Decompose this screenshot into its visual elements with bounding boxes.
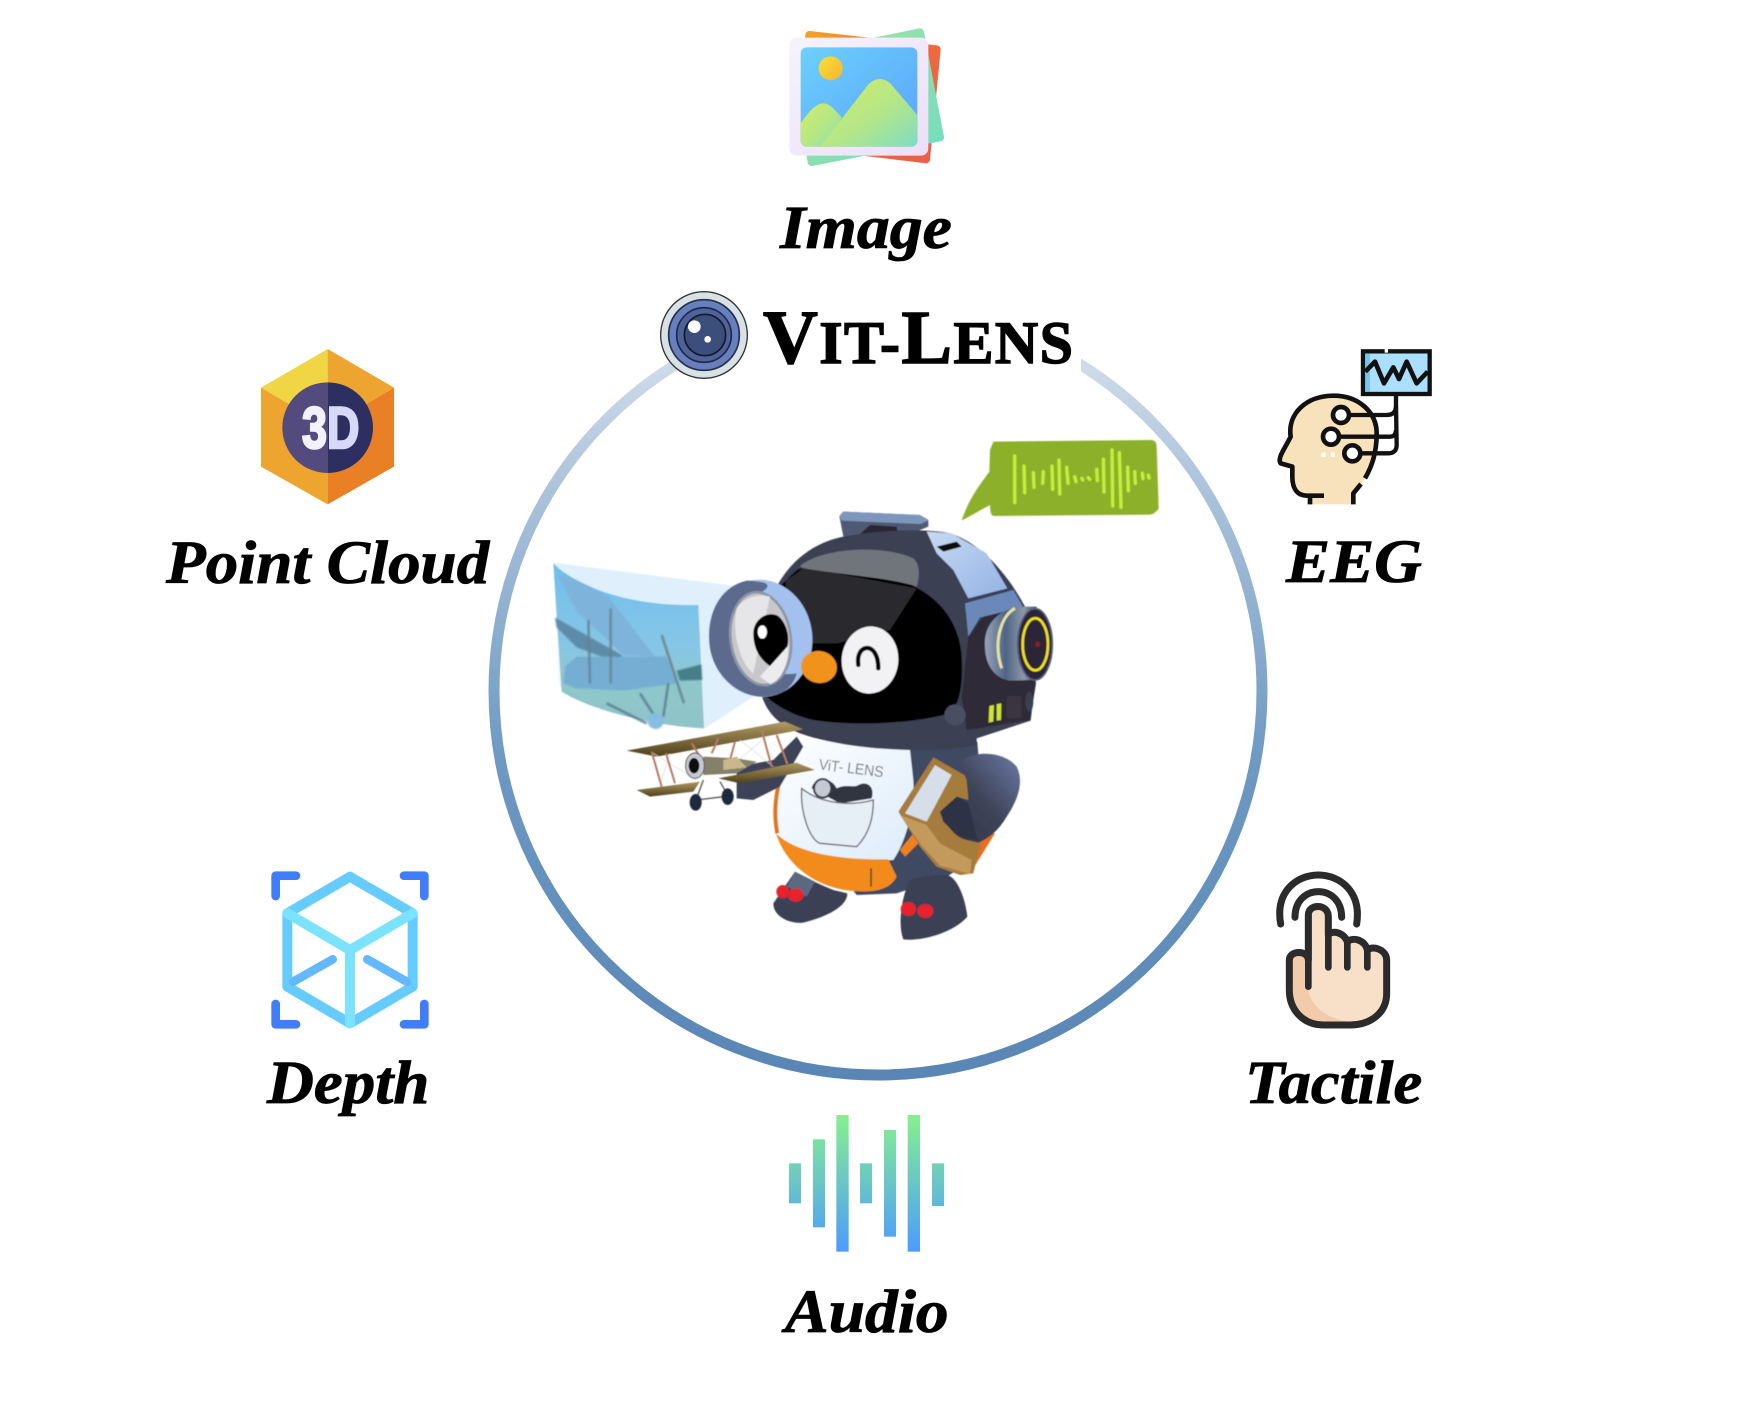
title: ViT-Lens: VIT-LENS xyxy=(763,296,1073,380)
toy biplane in flipper xyxy=(627,722,815,811)
title backing mask xyxy=(682,275,1081,375)
icon: 3D point cloud: 3D xyxy=(302,396,359,461)
image modality icon xyxy=(789,32,940,162)
magnifier lens over eye xyxy=(703,575,818,702)
mascot: penguin with helmet xyxy=(553,440,1159,940)
projected biplane image xyxy=(553,563,753,729)
beak xyxy=(798,648,840,686)
icon: tactile touch hand xyxy=(1280,875,1387,1025)
lens logo xyxy=(661,292,747,378)
label: Audio: Audio xyxy=(781,1277,949,1346)
icon: audio waveform xyxy=(789,1115,944,1252)
label: EEG: EEG xyxy=(1285,527,1422,596)
ring around mascot xyxy=(494,307,1262,1075)
helmet and face xyxy=(760,512,1052,750)
icon: EEG head and monitor xyxy=(1280,349,1430,507)
body with belly, belt, book and feet: ViT- LENS xyxy=(818,756,884,781)
speech bubble with waveform xyxy=(962,440,1159,521)
label: Point Cloud: Point Cloud xyxy=(165,528,491,597)
label: Image: Image xyxy=(779,193,952,262)
label: Depth: Depth xyxy=(266,1048,429,1117)
label: Tactile: Tactile xyxy=(1245,1048,1422,1117)
body with belly, belt, book and feet xyxy=(773,738,1020,940)
icon: 3D point cloud xyxy=(261,349,394,504)
icon: depth cube xyxy=(276,876,424,1024)
